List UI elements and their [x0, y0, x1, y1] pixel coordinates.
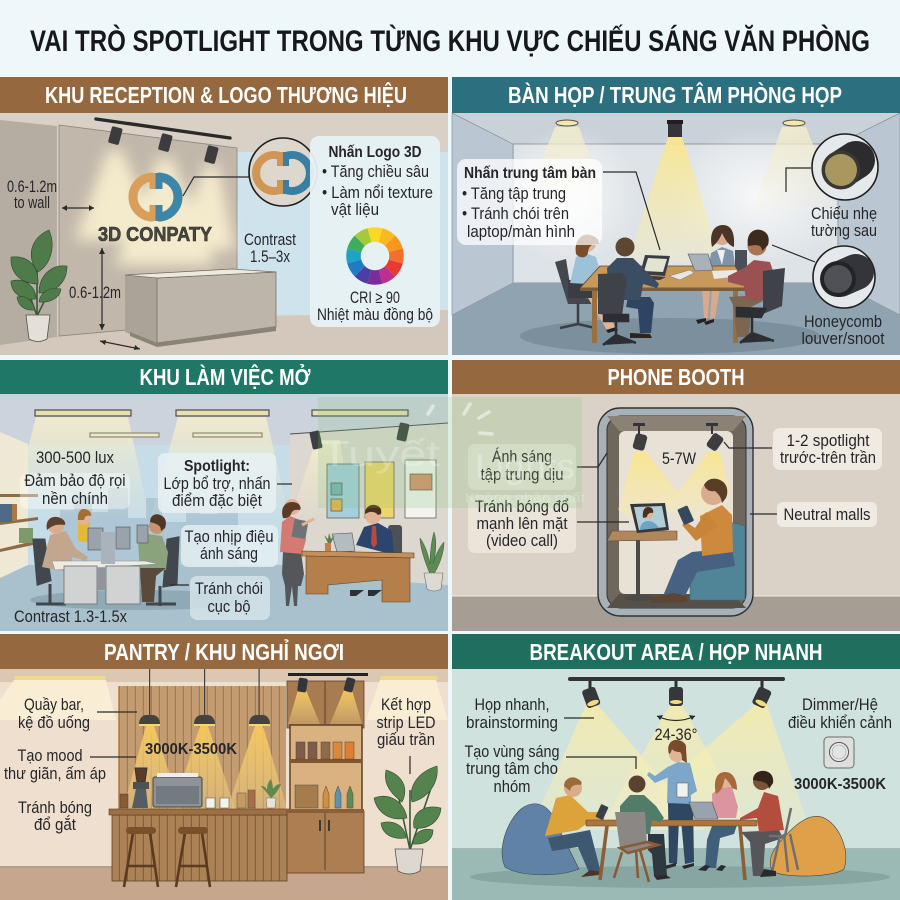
side labels: tường sau — [811, 222, 877, 240]
card: center of table: laptop/màn hình — [467, 223, 575, 241]
callout: glare — [170, 576, 270, 620]
callout card: logo accent: • Tăng chiều sâu — [322, 163, 429, 181]
workspace header: KHU LÀM VIỆC MỞ — [140, 362, 311, 390]
reception desk — [125, 269, 276, 347]
pantry right note: strip LED — [376, 714, 436, 732]
beam angle arc — [654, 715, 698, 744]
pantry room — [0, 669, 448, 900]
pantry left notes: Tránh bóng — [18, 799, 92, 817]
counter items — [120, 768, 281, 808]
wattage label: 5-7W — [662, 450, 696, 468]
left notes: Họp nhanh, — [474, 696, 550, 714]
logo zoom circle — [249, 138, 317, 206]
pantry left notes — [4, 696, 137, 834]
group table and people — [545, 740, 798, 882]
sofa and seated man — [650, 479, 745, 603]
logo callout line — [183, 177, 249, 196]
callout: glare: cục bộ — [208, 598, 250, 616]
panel: breakout area — [452, 634, 900, 900]
card: spotlight count: 1-2 spotlight — [786, 432, 870, 450]
callout: rhythm — [181, 525, 278, 567]
pantry left notes: Tạo mood — [18, 747, 82, 765]
card: spotlight count: trước-trên trần — [780, 449, 876, 467]
track with spotlights — [568, 677, 785, 709]
pantry right note: Kết hợp — [381, 696, 431, 714]
booth room — [452, 394, 900, 631]
track light — [96, 119, 230, 164]
booth lights — [618, 423, 730, 530]
back view man — [598, 238, 659, 345]
watermark — [318, 397, 585, 508]
card: center of table — [457, 159, 602, 245]
plant — [374, 766, 441, 874]
office spotlights — [290, 422, 448, 450]
ceiling lights and beams — [520, 120, 840, 262]
table — [580, 254, 750, 343]
callout: rhythm: ánh sáng — [200, 545, 258, 563]
reception room background — [0, 113, 448, 355]
pantry left notes: Quầy bar, — [24, 696, 84, 714]
office desk with man — [302, 505, 414, 602]
callout: lux: nền chính — [42, 490, 108, 508]
table with tablet — [607, 503, 677, 601]
meeting room — [452, 113, 900, 355]
left chair and woman — [555, 234, 618, 333]
callout card: logo accent — [310, 136, 440, 327]
corner plant — [420, 532, 444, 591]
meeting header — [452, 77, 900, 113]
dimension labels: to wall — [14, 194, 50, 212]
3D logo — [133, 173, 178, 221]
shelves — [0, 494, 38, 552]
right man — [740, 771, 798, 877]
dimmer notes: 3000K-3500K — [794, 776, 886, 793]
panel: open workspace — [0, 360, 448, 631]
callout card: logo accent: vật liệu — [331, 201, 379, 219]
side labels: louver/snoot — [802, 330, 885, 348]
card: shadow — [468, 495, 576, 553]
color wheel — [345, 226, 405, 286]
contrast note — [244, 231, 296, 266]
contrast note: 1.5–3x — [250, 248, 291, 266]
presenter — [647, 740, 697, 869]
booth header: PHONE BOOTH — [608, 364, 744, 390]
callout card: logo accent: Nhiệt màu đồng bộ — [317, 306, 433, 324]
callout: spotlight: Lớp bổ trợ, nhấn — [164, 475, 270, 493]
card: center of table: Nhấn trung tâm bàn — [464, 165, 596, 182]
callout lines — [577, 442, 777, 522]
panel: pantry — [0, 634, 448, 900]
card: neutral walls — [777, 502, 877, 527]
icon: dimmer switch — [824, 737, 854, 768]
counter and stools — [109, 809, 290, 887]
card: neutral walls: Neutral malls — [784, 506, 870, 524]
callout: spotlight — [158, 453, 292, 513]
booth header — [452, 360, 900, 394]
brand name: 3D CONPATY — [98, 224, 213, 246]
workspace room — [0, 394, 448, 631]
temperature label: 3000K-3500K — [145, 741, 237, 758]
panel: meeting table — [452, 77, 900, 355]
pendant lamps — [139, 669, 270, 726]
dimension labels: 0.6-1.2m — [69, 284, 121, 302]
watermark: Tuyết — [320, 433, 440, 474]
plant — [11, 230, 67, 342]
callout: rhythm: Tạo nhịp điệu — [184, 528, 274, 546]
laptop on table — [640, 255, 670, 280]
beam angle arc: 24-36° — [654, 726, 698, 744]
beanbags — [502, 804, 846, 876]
honeycomb lens icon — [812, 134, 878, 200]
pantry left notes: kệ đồ uống — [18, 714, 90, 732]
pantry left notes: đổ gắt — [34, 815, 76, 834]
linear ceiling lights — [35, 410, 408, 437]
callout: lux — [20, 449, 130, 509]
card: center of table: • Tránh chói trên — [462, 205, 569, 223]
far woman — [696, 225, 747, 325]
watermark: Lights — [475, 448, 575, 486]
contrast label: Contrast 1.3-1.5x — [14, 608, 128, 626]
wall posters — [327, 460, 436, 518]
reception header — [0, 77, 448, 113]
display cabinet — [287, 673, 368, 873]
side labels — [802, 205, 885, 348]
callout: lux: Đảm bảo độ rọi — [24, 472, 126, 490]
pantry header — [0, 634, 448, 669]
callout card: logo accent: CRI ≥ 90 — [350, 289, 400, 307]
pantry header: PANTRY / KHU NGHỈ NGƠI — [104, 637, 344, 665]
pantry left notes: thư giãn, ấm áp — [4, 765, 106, 783]
card: shadow: (video call) — [486, 532, 558, 550]
reception header: KHU RECEPTION & LOGO THƯƠNG HIỆU — [45, 81, 407, 108]
pantry right note — [376, 696, 436, 774]
pantry right note: giấu trần — [377, 731, 435, 749]
card: focused light — [468, 444, 576, 490]
woman in pink — [698, 772, 738, 871]
card: focused light: Ánh sáng — [492, 447, 552, 466]
breakout room — [452, 669, 900, 900]
card: center of table: • Tăng tập trung — [462, 185, 566, 203]
left notes: nhóm — [494, 778, 530, 796]
left notes: brainstorming — [466, 714, 558, 732]
side labels: Chiếu nhẹ — [811, 205, 877, 223]
desk with workers — [34, 509, 178, 606]
dimension labels: 0.6-1.2m — [7, 178, 57, 196]
workspace header — [0, 360, 448, 394]
back view man — [614, 776, 671, 882]
dimmer notes: Dimmer/Hệ — [802, 696, 878, 714]
left notes: trung tâm cho — [466, 760, 558, 778]
callout lines — [603, 168, 815, 262]
left notes: Tạo vùng sáng — [464, 743, 560, 761]
breakout header: BREAKOUT AREA / HỌP NHANH — [530, 639, 822, 665]
breakout header — [452, 634, 900, 669]
contrast note: Contrast — [244, 231, 296, 249]
panel: phone booth — [452, 360, 900, 631]
card: focused light: tập trung dịu — [480, 466, 564, 484]
dimmer notes — [788, 696, 892, 793]
panel: reception — [0, 77, 448, 355]
callout: spotlight: Spotlight: — [184, 458, 250, 475]
presenter woman — [280, 499, 314, 606]
callout card: logo accent: • Làm nổi texture — [322, 184, 433, 202]
man left on beanbag — [545, 777, 609, 877]
dimension labels — [7, 178, 140, 350]
meeting people and table — [555, 225, 785, 345]
light beams — [530, 705, 810, 830]
watermark: Không nhân chất — [465, 490, 585, 505]
callout: lux: 300-500 lux — [36, 449, 115, 467]
left notes — [464, 696, 636, 796]
card: shadow: mạnh lên mặt — [476, 515, 568, 533]
card: shadow: Tránh bóng đổ — [475, 498, 569, 516]
slatted wood wall — [118, 686, 288, 868]
callout: spotlight: điểm đặc biệt — [172, 492, 262, 510]
callout card: logo accent: Nhấn Logo 3D — [328, 144, 422, 161]
callout: glare: Tránh chói — [195, 580, 263, 598]
side labels: Honeycomb — [804, 313, 882, 331]
right man — [728, 230, 785, 343]
card: spotlight count — [773, 428, 882, 470]
booth frame — [598, 408, 753, 616]
louver snoot icon — [813, 246, 875, 308]
table — [586, 802, 757, 880]
